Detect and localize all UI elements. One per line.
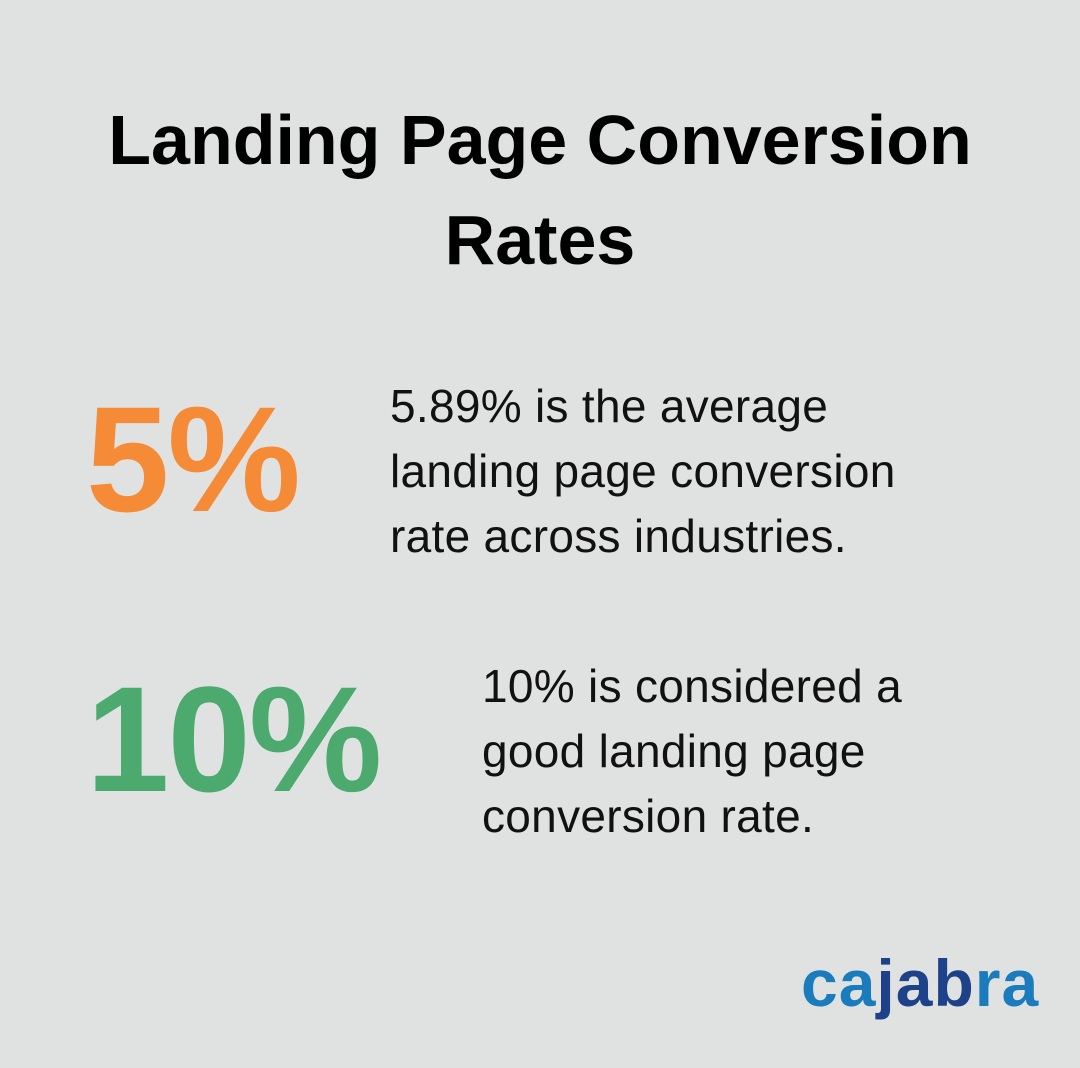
big number 10%: 10%	[86, 655, 380, 823]
description 5%: rate across industries.	[390, 510, 847, 562]
description 5%	[390, 380, 896, 562]
description 10%	[482, 660, 902, 842]
big number 5%: 5%	[86, 375, 299, 543]
title: Landing Page Conversion	[108, 101, 972, 179]
title	[108, 101, 972, 279]
description 10%: 10% is considered a	[482, 660, 902, 712]
stat: 5%	[86, 375, 896, 562]
description 10%: conversion rate.	[482, 790, 814, 842]
stat: 10%	[86, 655, 902, 842]
description 10%: good landing page	[482, 725, 866, 777]
description 5%: 5.89% is the average	[390, 380, 828, 432]
description 5%: landing page conversion	[390, 445, 896, 497]
logo: cajabra: cajabra	[801, 946, 1039, 1020]
title: Rates	[445, 201, 635, 279]
